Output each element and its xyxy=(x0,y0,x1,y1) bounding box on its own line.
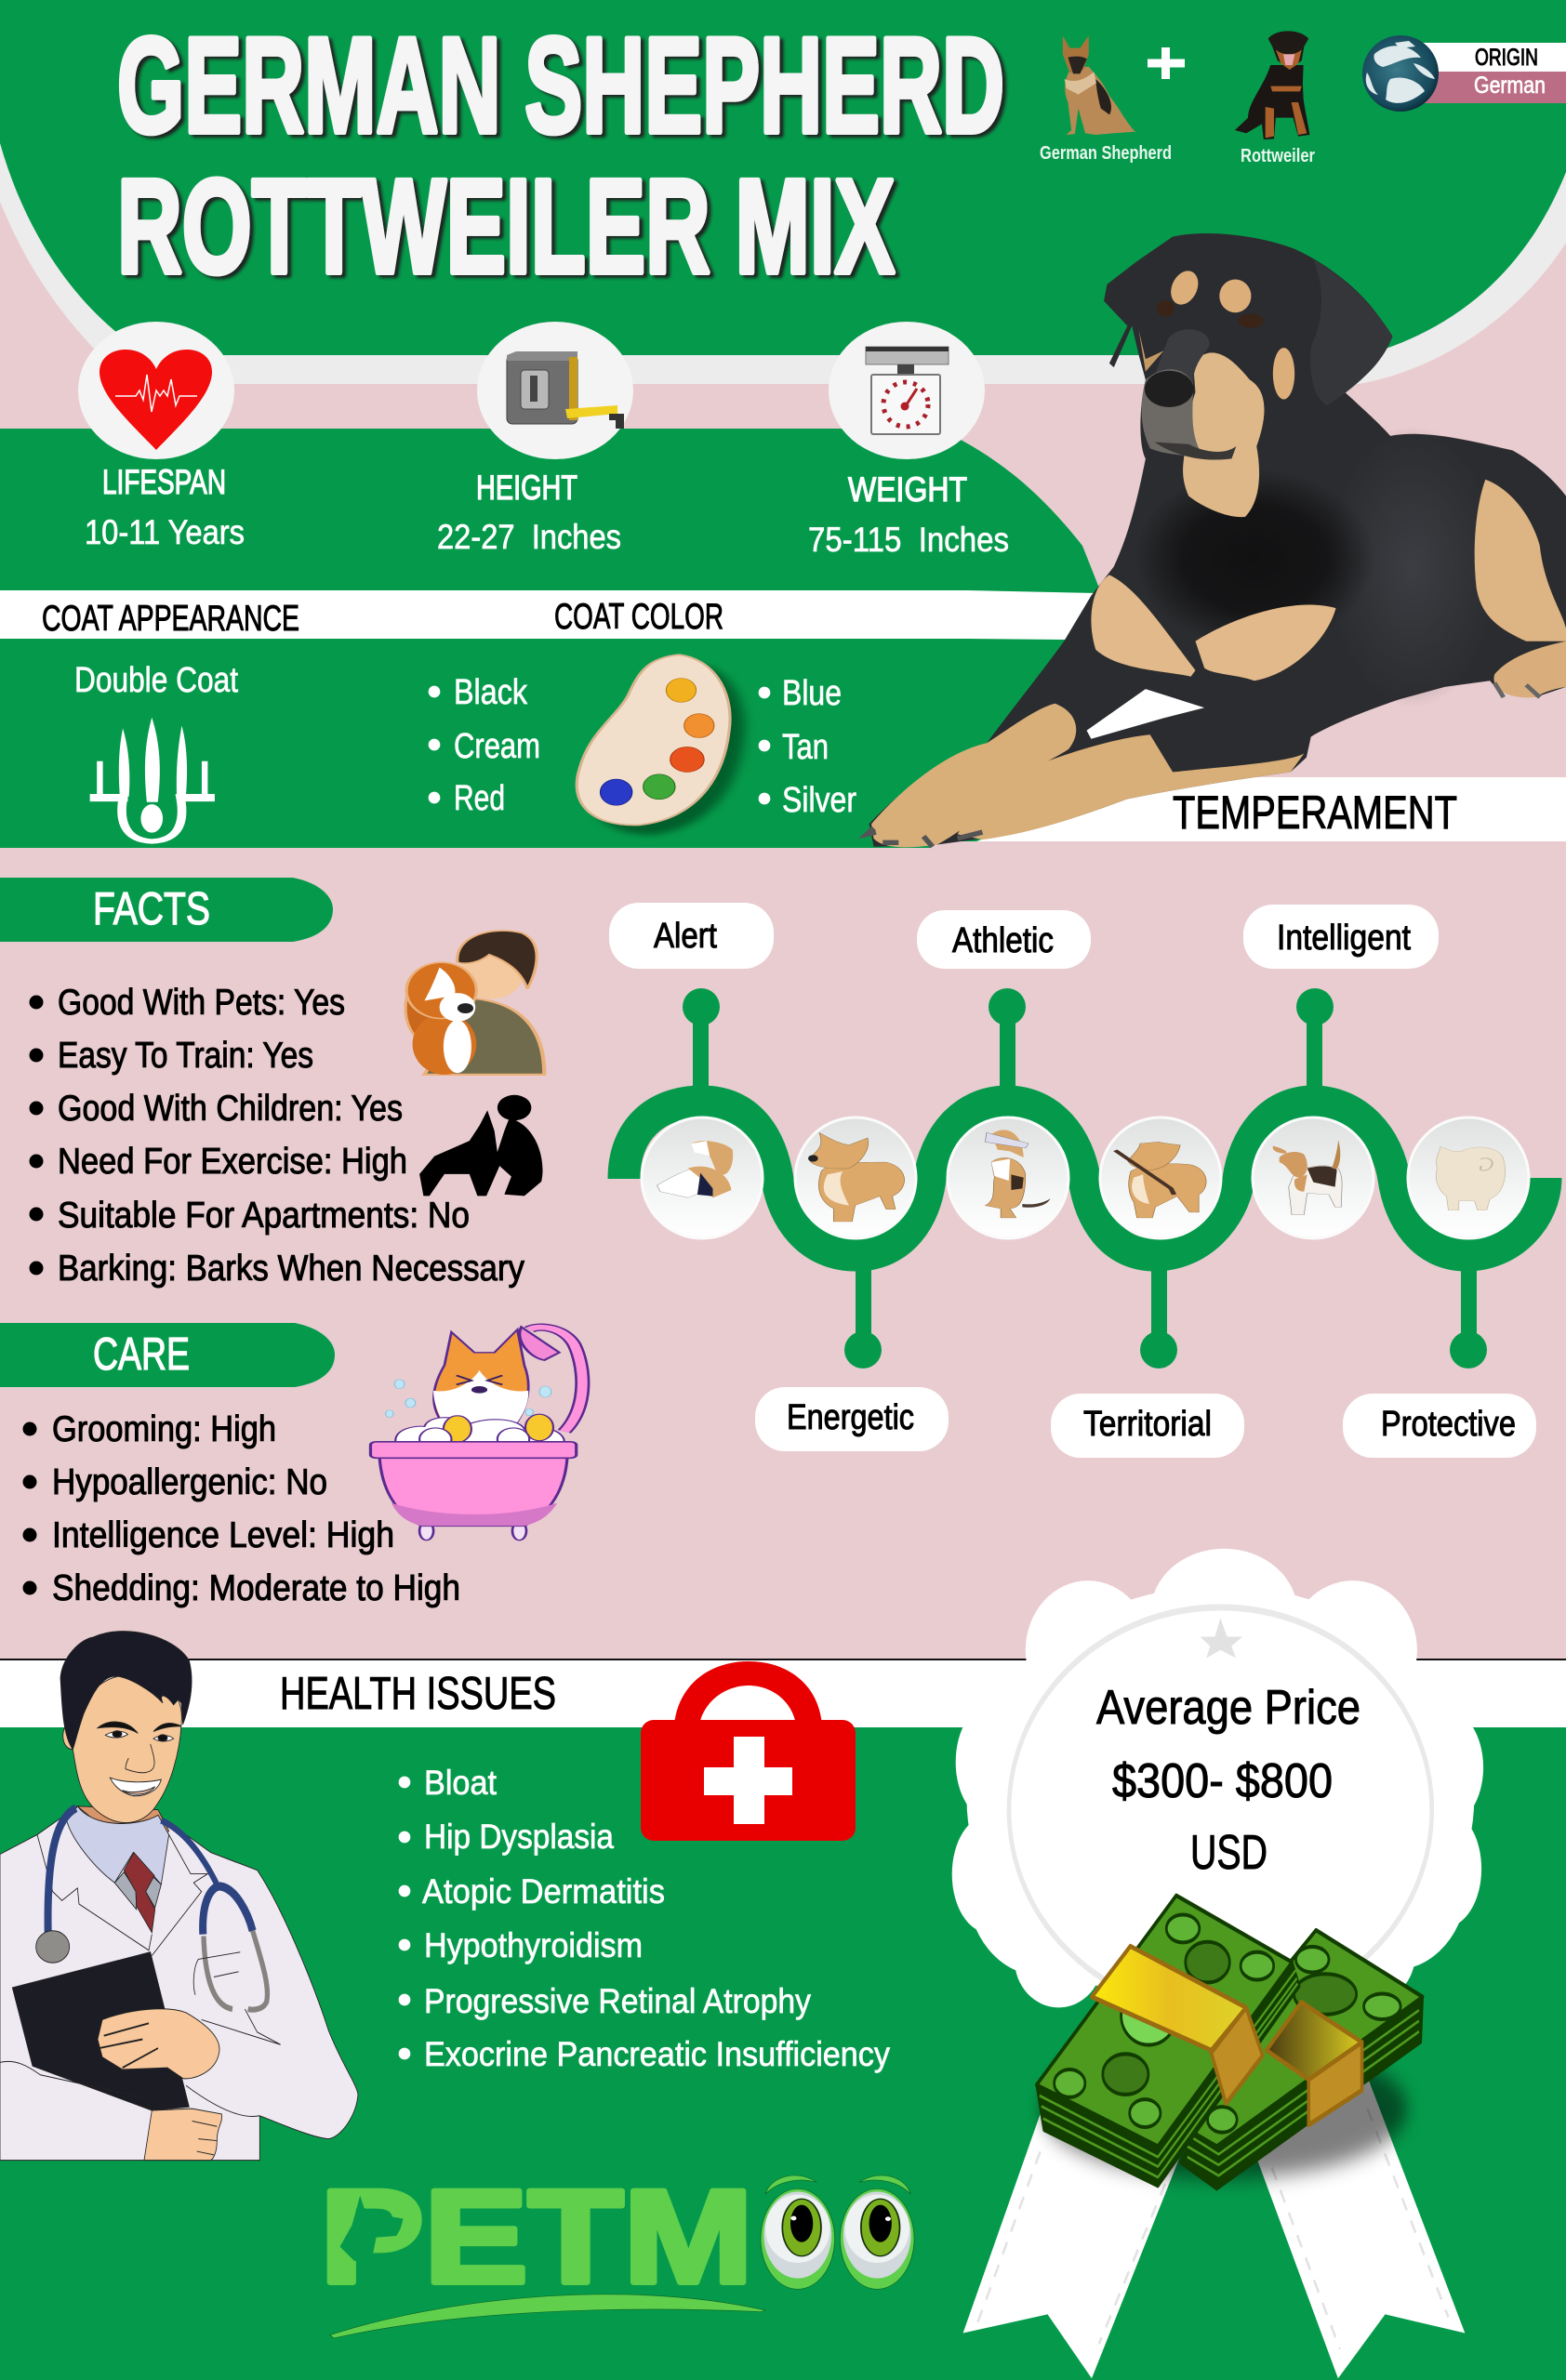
pill: athletic xyxy=(917,910,1091,969)
origin band mauve xyxy=(1423,72,1566,103)
bottom green panel xyxy=(0,1727,1566,2380)
eyes xyxy=(105,1731,174,1741)
hind paw tan xyxy=(1493,641,1566,697)
coat green panel xyxy=(0,632,1069,848)
price text xyxy=(1096,1681,1360,1880)
rosette xyxy=(952,1549,1483,2013)
logo: petmoo xyxy=(320,2163,914,2338)
origin badge xyxy=(1362,35,1566,112)
dog photo: rottweiler shepherd mix xyxy=(867,233,1566,847)
chest shadow xyxy=(1135,469,1374,647)
nose xyxy=(1145,371,1194,407)
pill: intelligent xyxy=(1243,905,1439,969)
list: facts: Suitable For Apartments: No xyxy=(58,1196,470,1236)
pill: facts xyxy=(0,878,333,942)
list: health issues: Exocrine Pancreatic Insufficiency xyxy=(424,2035,890,2073)
list: coat colors right xyxy=(759,674,856,820)
icon: scale xyxy=(866,347,949,434)
left eye xyxy=(761,2188,835,2289)
left band xyxy=(1092,1946,1246,2050)
smile xyxy=(110,1778,161,1796)
collar xyxy=(67,1806,169,1884)
pill: energetic xyxy=(755,1387,949,1451)
icon: german shepherd xyxy=(1063,35,1135,135)
origin value: German xyxy=(1474,73,1546,99)
price text: $300- $800 xyxy=(1112,1754,1333,1808)
stat: height xyxy=(437,469,621,556)
price text: USD xyxy=(1190,1826,1267,1880)
eyebrows xyxy=(98,1722,181,1733)
icon circle: corgi xyxy=(795,1117,916,1238)
pill: energetic: Energetic xyxy=(787,1398,914,1437)
temperament heading band xyxy=(976,777,1566,841)
doctor illustration xyxy=(0,1632,358,2161)
icon circle: height xyxy=(477,322,633,459)
body sheen xyxy=(1327,426,1499,707)
icon circle: lifespan xyxy=(78,322,234,459)
front leg left tan xyxy=(871,704,1076,847)
text: double coat: Double Coat xyxy=(74,661,238,700)
tub xyxy=(379,1457,567,1526)
right ear xyxy=(1310,259,1392,405)
shower head xyxy=(520,1327,559,1360)
pocket xyxy=(193,1952,240,1995)
eyebrows xyxy=(1166,268,1203,308)
pill: protective: Protective xyxy=(1381,1405,1516,1444)
dog body xyxy=(869,233,1566,847)
icon circle: corgi with stick xyxy=(1100,1117,1221,1238)
stat: height: 22-27 Inches xyxy=(437,518,621,556)
pill: athletic: Athletic xyxy=(952,921,1054,960)
stethoscope grey xyxy=(204,1931,267,2010)
stat: lifespan xyxy=(85,463,245,551)
origin label: ORIGIN xyxy=(1475,45,1538,71)
nose bridge xyxy=(1155,329,1210,384)
heading: facts: FACTS xyxy=(93,884,210,934)
chest left tan xyxy=(1091,575,1195,677)
list: care: Intelligence Level: High xyxy=(52,1515,394,1555)
list: care xyxy=(23,1409,460,1608)
lower hand xyxy=(144,2109,222,2161)
origin band white xyxy=(1423,43,1566,72)
icon: person and dog silhouette xyxy=(419,1095,543,1196)
list: facts: Good With Pets: Yes xyxy=(58,983,345,1023)
muzzle grey xyxy=(1142,369,1204,458)
icon circle: beagle upright xyxy=(948,1117,1068,1238)
list: health issues xyxy=(399,1764,890,2073)
list: health issues: Hypothyroidism xyxy=(424,1926,643,1964)
hair xyxy=(60,1632,192,1750)
pill: care xyxy=(0,1323,335,1387)
top arc light border xyxy=(0,0,1566,384)
label: rottweiler: Rottweiler xyxy=(1241,146,1315,166)
coat xyxy=(0,1806,358,2161)
right eye xyxy=(840,2188,914,2289)
list: care: Grooming: High xyxy=(52,1409,276,1449)
shower arm xyxy=(529,1328,582,1432)
upper hand xyxy=(98,2009,219,2079)
temperament wave xyxy=(624,1102,1546,1255)
swoosh xyxy=(330,2294,765,2338)
stat: lifespan: LIFESPAN xyxy=(102,463,226,501)
left stack xyxy=(1037,1896,1299,2187)
top green header panel xyxy=(0,0,1566,355)
heading: health issues: HEALTH ISSUES xyxy=(280,1669,556,1719)
icon: globe xyxy=(1362,35,1439,112)
shirt shade xyxy=(114,1872,161,1910)
coat heading band xyxy=(0,590,1097,640)
list: facts: Good With Children: Yes xyxy=(58,1089,403,1129)
list: facts: Barking: Barks When Necessary xyxy=(58,1249,524,1289)
tie xyxy=(124,1853,155,1933)
list: coat colors right: Tan xyxy=(782,728,829,767)
list: facts: Easy To Train: Yes xyxy=(58,1036,313,1076)
stat: weight: WEIGHT xyxy=(848,470,967,509)
heading: care: CARE xyxy=(93,1329,190,1380)
icon circle: basset sitting xyxy=(642,1117,763,1238)
ribbons xyxy=(963,2077,1465,2378)
pill: territorial xyxy=(1051,1394,1244,1458)
dog cutout in P xyxy=(340,2196,404,2264)
nose xyxy=(126,1744,154,1773)
chest right tan xyxy=(1195,604,1336,681)
pill: alert: Alert xyxy=(654,917,717,956)
muzzle tan xyxy=(1183,352,1265,517)
list: coat colors left xyxy=(429,673,540,818)
icon: rottweiler xyxy=(1235,31,1309,139)
icon: first aid kit xyxy=(641,1661,856,1841)
title xyxy=(117,9,1004,301)
connectors top xyxy=(683,988,1334,1089)
bubbles xyxy=(386,1380,551,1417)
eyebrows xyxy=(765,2175,817,2194)
tablet xyxy=(12,1952,189,2110)
ducks xyxy=(444,1416,471,1442)
list: health issues: Hip Dysplasia xyxy=(424,1818,614,1856)
list: health issues: Bloat xyxy=(424,1764,498,1802)
icon: hair follicle xyxy=(90,718,215,841)
right band xyxy=(1267,2003,1362,2080)
front leg right tan xyxy=(958,734,1304,840)
list: coat colors right: Silver xyxy=(782,781,856,820)
pill: intelligent: Intelligent xyxy=(1277,919,1411,958)
list: facts: Need For Exercise: High xyxy=(58,1142,407,1182)
cheek tan xyxy=(1273,348,1294,400)
pill: alert xyxy=(609,903,774,969)
list: facts xyxy=(30,983,524,1289)
price text: Average Price xyxy=(1096,1681,1360,1735)
stat: weight: 75-115 Inches xyxy=(808,521,1009,559)
list: health issues: Atopic Dermatitis xyxy=(422,1872,665,1911)
price badge xyxy=(952,1549,1483,2378)
pill: territorial: Territorial xyxy=(1083,1405,1212,1444)
stethoscope blue xyxy=(48,1808,76,1933)
stethoscope chest piece xyxy=(36,1931,70,1963)
pill: protective xyxy=(1343,1394,1536,1458)
list: care: Hypoallergenic: No xyxy=(52,1462,327,1502)
icon circle: beagle standing xyxy=(1253,1117,1374,1238)
health band top rule xyxy=(0,1659,1566,1660)
stat: weight xyxy=(808,470,1009,559)
hind leg tan xyxy=(1475,480,1566,641)
icon: plus sign xyxy=(1148,47,1185,79)
foam xyxy=(395,1418,564,1442)
neck xyxy=(77,1806,169,1853)
list: health issues: Progressive Retinal Atrophy xyxy=(424,1982,811,2020)
shiba xyxy=(433,1329,528,1432)
icon: shiba in bathtub xyxy=(370,1327,582,1540)
icon: heart xyxy=(100,350,212,450)
paws xyxy=(419,1428,451,1450)
icon: boy hugging dog xyxy=(405,931,544,1075)
white floor patch xyxy=(1087,689,1204,739)
icon circle: weight xyxy=(829,322,985,459)
tub feet xyxy=(419,1522,433,1540)
toe nails xyxy=(867,828,982,847)
icon: money stacks xyxy=(1037,1896,1423,2189)
logo letters: PETM xyxy=(320,2163,753,2311)
sleeve crease xyxy=(0,2009,281,2117)
stat: height: HEIGHT xyxy=(476,469,577,507)
heading: coat color: COAT COLOR xyxy=(554,597,723,637)
eyes xyxy=(1157,300,1174,317)
stat: lifespan: 10-11 Years xyxy=(85,513,245,551)
heading: temperament: TEMPERAMENT xyxy=(1173,787,1457,839)
title: ROTTWEILER MIX xyxy=(117,152,895,301)
face xyxy=(63,1674,181,1823)
label: german shepherd: German Shepherd xyxy=(1040,143,1172,164)
list: coat colors right: Blue xyxy=(782,674,842,713)
health white band xyxy=(0,1660,1566,1727)
connectors bottom xyxy=(844,1269,1487,1368)
icon: tape measure xyxy=(507,351,624,429)
list: care: Shedding: Moderate to High xyxy=(52,1568,460,1608)
list: coat colors left: Cream xyxy=(454,727,540,766)
icon circle: pomeranian xyxy=(1408,1117,1529,1238)
stats green panel xyxy=(0,429,1102,651)
right stack xyxy=(1180,1930,1423,2189)
list: coat colors left: Black xyxy=(454,673,528,712)
title: GERMAN SHEPHERD xyxy=(117,9,1004,161)
lapels xyxy=(37,1834,207,1956)
heading: coat appearance: COAT APPEARANCE xyxy=(42,599,299,639)
list: coat colors left: Red xyxy=(454,779,505,818)
icon: paint palette xyxy=(577,654,745,835)
